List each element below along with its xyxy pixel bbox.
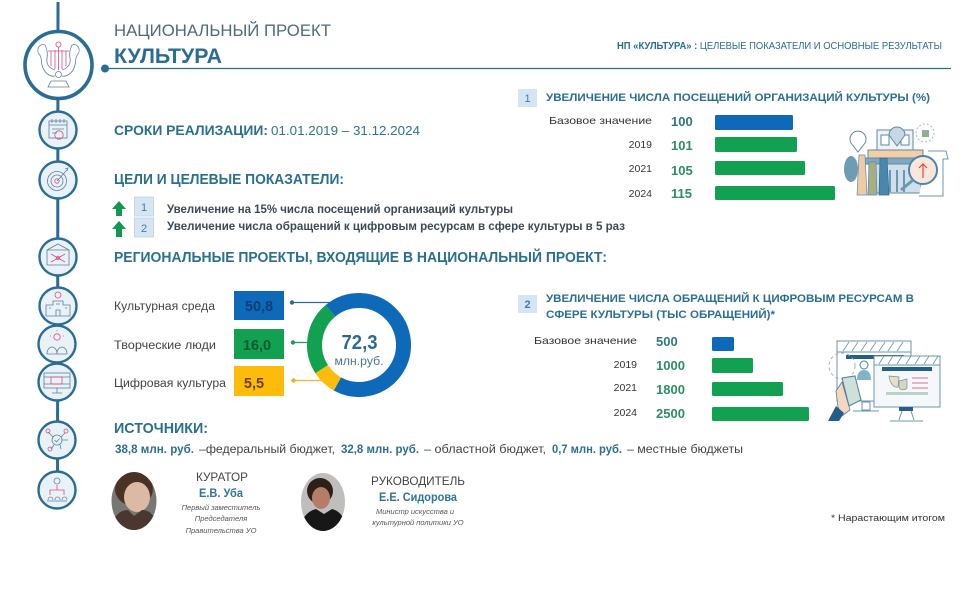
- goal 2: 2: [141, 223, 147, 235]
- regional project: creative people: Творческие люди: [114, 340, 216, 352]
- icon: lyre emblem: [25, 32, 92, 98]
- chart 1 bars: [715, 115, 835, 200]
- chart 2 labels: 2019: [614, 359, 637, 371]
- chart 2 bars: [712, 337, 809, 421]
- chart 2 labels: 2024: [614, 407, 637, 419]
- implementation dates: [114, 122, 420, 138]
- implementation dates: СРОКИ РЕАЛИЗАЦИИ:: [114, 122, 268, 138]
- chart 2 labels: [534, 335, 637, 419]
- chart 1 labels: 2024: [629, 188, 652, 200]
- head caption: культурной политики УО: [372, 518, 464, 527]
- panel: digital resources chart: [518, 292, 914, 421]
- chart 2 values: 1000: [656, 358, 685, 373]
- regional project: creative people: [114, 329, 310, 359]
- sources text: – областной бюджет,: [424, 444, 546, 456]
- goal 2: [112, 218, 625, 237]
- illustration: museum and visitors: [844, 124, 948, 196]
- sources text: 38,8 млн. руб.: [115, 444, 194, 456]
- regional project: digital culture: Цифровая культура: [114, 378, 227, 390]
- photo: project head: [300, 472, 346, 532]
- chart 2 heading: 2: [524, 299, 531, 311]
- goal 2: Увеличение числа обращений к цифровым ресурсам в сфере культуры в 5 раз: [167, 221, 625, 233]
- chart 2 values: 500: [656, 334, 678, 349]
- goal 1: 1: [141, 202, 147, 214]
- title: НАЦИОНАЛЬНЫЙ ПРОЕКТ: [114, 21, 331, 40]
- goal 1: [112, 197, 513, 216]
- regional project: cultural environment: [114, 291, 331, 320]
- chart 1 values: 115: [671, 186, 692, 201]
- heading: goals: ЦЕЛИ И ЦЕЛЕВЫЕ ПОКАЗАТЕЛИ:: [114, 172, 344, 188]
- photo: curator: [112, 472, 156, 530]
- header rule: [101, 64, 951, 72]
- head caption: Е.Е. Сидорова: [379, 492, 458, 504]
- head caption: Министр искусства и: [376, 507, 455, 516]
- heading: sources: ИСТОЧНИКИ:: [114, 420, 208, 437]
- chart 2 heading: СФЕРЕ КУЛЬТУРЫ (ТЫС ОБРАЩЕНИЙ)*: [546, 308, 776, 321]
- curator caption: [182, 472, 260, 535]
- illustration: screens and hand: [828, 341, 940, 421]
- icon: building with pin: [40, 288, 76, 324]
- chart 2 heading: УВЕЛИЧЕНИЕ ЧИСЛА ОБРАЩЕНИЙ К ЦИФРОВЫМ РЕСУРСАМ В: [546, 292, 914, 305]
- regional project: digital culture: 5,5: [244, 376, 264, 392]
- implementation dates: 01.01.2019 – 31.12.2024: [271, 123, 420, 138]
- chart 2 values: 2500: [656, 406, 685, 421]
- chart 1 labels: 2019: [629, 139, 652, 151]
- icon: calendar: [40, 112, 76, 148]
- regional project: cultural environment: Культурная среда: [114, 301, 216, 313]
- curator caption: Правительства УО: [186, 526, 257, 535]
- head caption: РУКОВОДИТЕЛЬ: [371, 476, 465, 488]
- chart 2 values: [656, 334, 685, 421]
- curator caption: Первый заместитель: [182, 503, 260, 512]
- chart 1 labels: 2021: [629, 163, 652, 175]
- curator caption: КУРАТОР: [196, 472, 248, 484]
- chart 2 labels: 2021: [614, 382, 637, 394]
- sources text: 0,7 млн. руб.: [552, 444, 622, 456]
- chart 2 values: 1800: [656, 382, 685, 397]
- sources text: – местные бюджеты: [627, 444, 743, 456]
- regional project: creative people: 16,0: [243, 338, 271, 354]
- chart 2 heading: [518, 292, 914, 321]
- donut chart: млн.руб.: [334, 356, 384, 368]
- chart 1 heading: [518, 89, 930, 107]
- regional project: digital culture: [114, 366, 323, 396]
- sources text: 32,8 млн. руб.: [341, 444, 419, 456]
- panel: visits chart: [518, 89, 930, 201]
- icon: target: [40, 162, 76, 198]
- chart 1 labels: [549, 115, 652, 200]
- icon: creative people: [38, 326, 76, 362]
- goal 1: Увеличение на 15% числа посещений организаций культуры: [167, 204, 513, 216]
- chart 1 heading: УВЕЛИЧЕНИЕ ЧИСЛА ПОСЕЩЕНИЙ ОРГАНИЗАЦИЙ КУЛЬТУРЫ (%): [546, 91, 930, 104]
- regional project: cultural environment: 50,8: [245, 299, 273, 315]
- timeline spine with icons: [25, 2, 92, 508]
- chart 1 values: 105: [671, 163, 693, 178]
- chart 1 heading: 1: [524, 93, 531, 105]
- icon: network check: [38, 422, 76, 458]
- title: КУЛЬТУРА: [114, 45, 222, 68]
- donut chart: [315, 300, 403, 389]
- heading: regional projects: РЕГИОНАЛЬНЫЕ ПРОЕКТЫ, ВХОДЯЩИЕ В НАЦИОНАЛЬНЫЙ ПРОЕКТ:: [114, 248, 607, 266]
- icon: video screen: [38, 364, 76, 400]
- icon: house with network: [40, 238, 76, 276]
- chart 1 values: 101: [671, 138, 693, 153]
- sources text: –федеральный бюджет,: [199, 444, 335, 456]
- head caption: [371, 476, 465, 527]
- chart 1 labels: Базовое значение: [549, 115, 652, 127]
- chart 1 values: 100: [671, 114, 693, 129]
- curator caption: Председателя: [195, 514, 247, 523]
- chart 2 labels: Базовое значение: [534, 335, 637, 347]
- sources text: [115, 444, 743, 456]
- chart 1 values: [671, 114, 693, 201]
- title: [114, 21, 331, 68]
- subtitle: НП «КУЛЬТУРА» : ЦЕЛЕВЫЕ ПОКАЗАТЕЛИ И ОСНОВНЫЕ РЕЗУЛЬТАТЫ: [617, 41, 942, 52]
- curator caption: Е.В. Уба: [199, 488, 244, 500]
- icon: team hierarchy: [38, 472, 76, 508]
- donut chart: 72,3: [342, 332, 378, 354]
- footnote: * Нарастающим итогом: [831, 513, 945, 523]
